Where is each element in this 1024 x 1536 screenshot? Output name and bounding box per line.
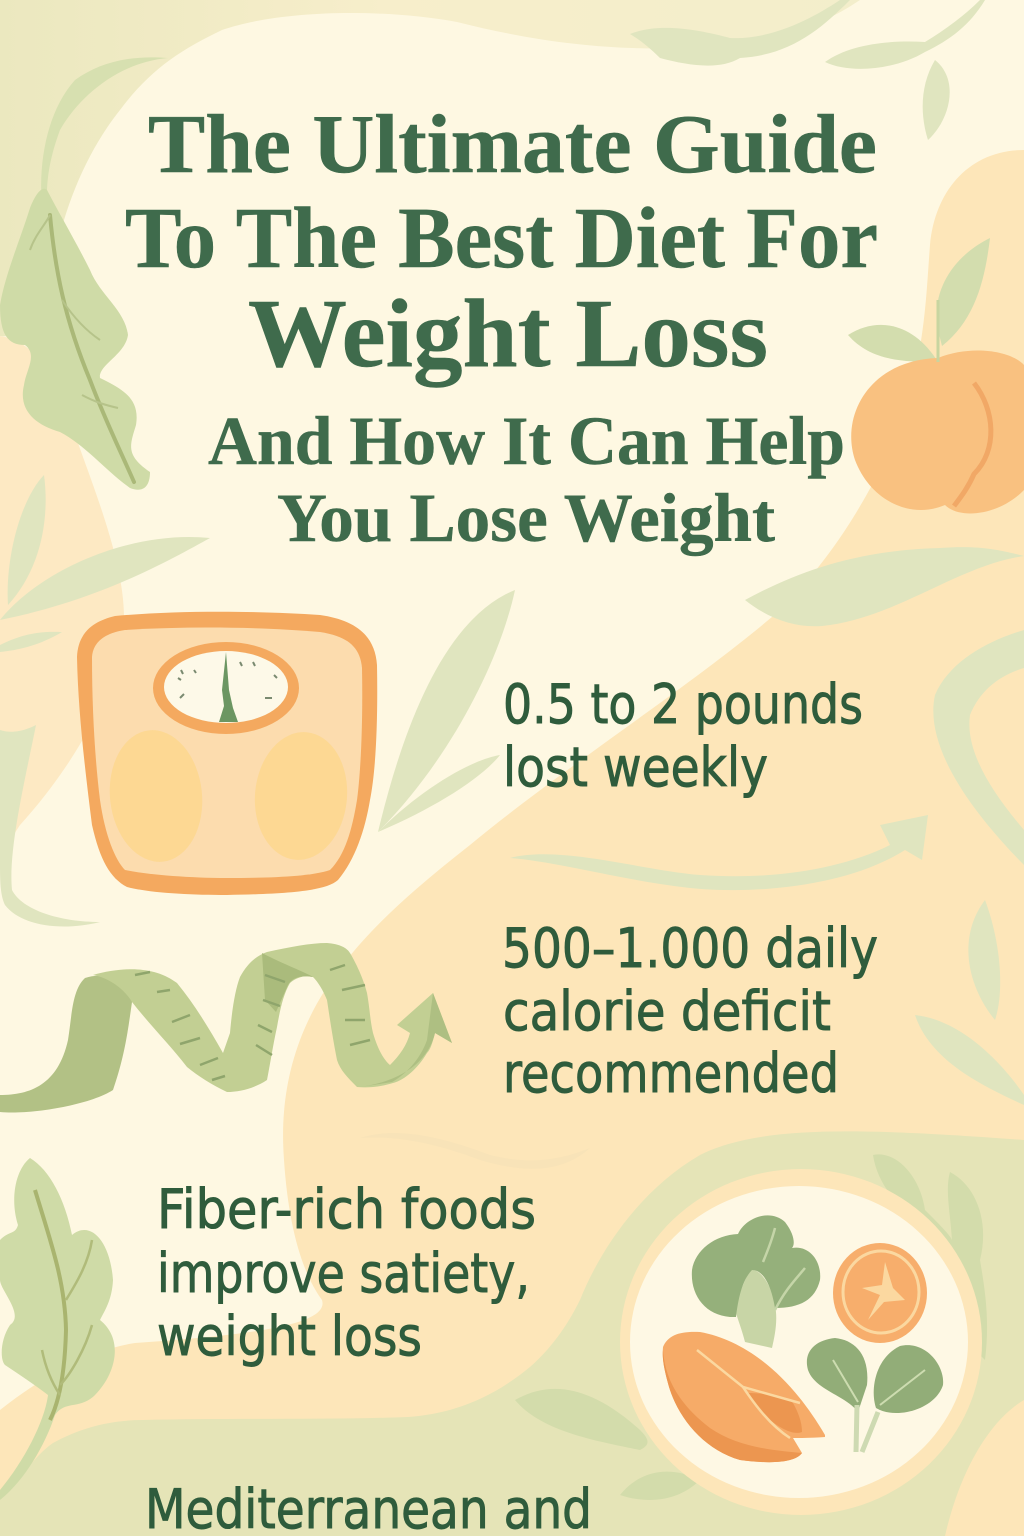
title <box>125 98 878 556</box>
icon: left oak leaf top <box>0 189 150 490</box>
stat: fiber-rich foods: Fiber-rich foods <box>157 1178 536 1241</box>
bottom leaves by plate <box>515 1154 987 1500</box>
stat: fiber-rich foods: weight loss <box>157 1305 422 1368</box>
stat: fiber-rich foods <box>157 1178 536 1368</box>
stat: weekly weight loss <box>503 673 863 799</box>
title: To The Best Diet For <box>125 189 878 286</box>
title: The Ultimate Guide <box>148 98 877 191</box>
title: Weight Loss <box>248 280 768 388</box>
title: And How It Can Help <box>208 403 845 479</box>
salmon fillet <box>663 1332 825 1462</box>
icon: left leaf bottom <box>0 1158 115 1500</box>
icon: measuring tape with arrow <box>0 943 452 1113</box>
icon: peach <box>848 238 1024 513</box>
stat: weekly weight loss: lost weekly <box>503 736 768 799</box>
top left decorative leaf stem <box>41 57 168 220</box>
orange slice <box>833 1243 927 1343</box>
stat: fiber-rich foods: improve satiety, <box>157 1242 530 1305</box>
icon: bathroom scale <box>77 612 377 895</box>
stat: calorie deficit: recommended <box>503 1042 839 1105</box>
stat: calorie deficit: 500–1.000 daily <box>502 917 878 980</box>
title: You Lose Weight <box>277 480 775 556</box>
broccoli <box>692 1215 820 1348</box>
background leaves and swooshes <box>0 0 1024 1169</box>
stat: calorie deficit <box>502 917 878 1105</box>
spinach leaves <box>807 1338 943 1452</box>
stat: calorie deficit: calorie deficit <box>503 980 831 1043</box>
icon: plate of food <box>620 1169 982 1515</box>
stat: weekly weight loss: 0.5 to 2 pounds <box>503 673 863 736</box>
